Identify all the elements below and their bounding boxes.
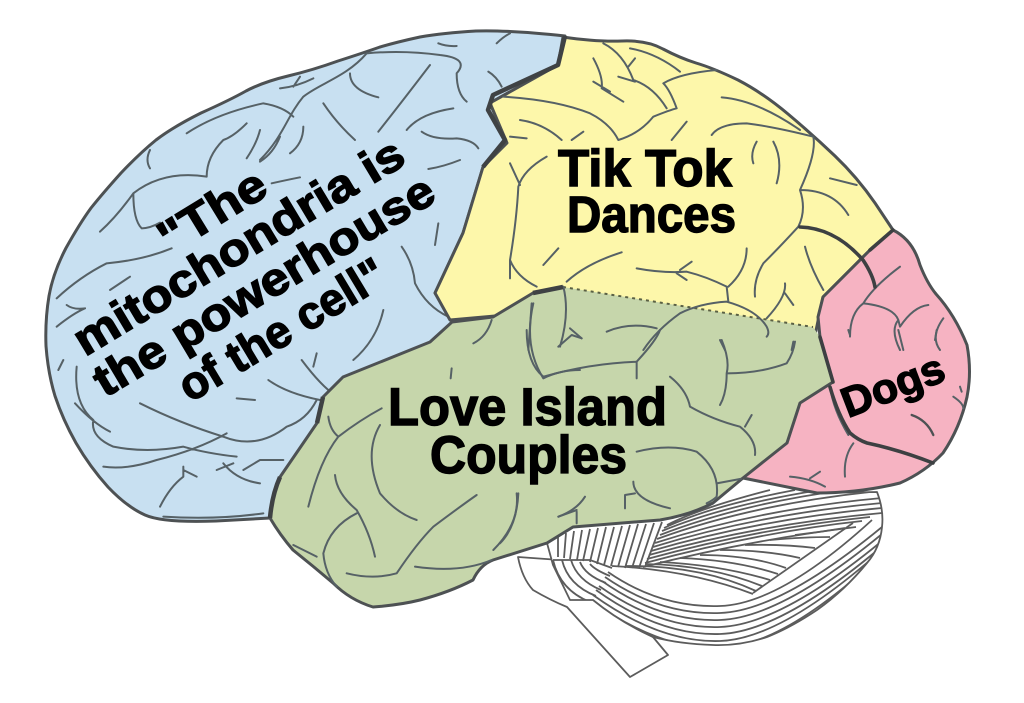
label: frontal lobe quote: of the cell": [168, 247, 395, 412]
label: frontal lobe quote: "The: [148, 158, 276, 264]
panel: occipital lobe (pink): [743, 227, 970, 493]
icon: brain stem: [518, 557, 668, 677]
cerebellum: [547, 478, 882, 648]
label: parietal lobe: Tik Tok: [558, 140, 732, 198]
label: frontal lobe quote: [63, 127, 444, 412]
parietal lobe folds: [503, 43, 857, 318]
label: temporal lobe: [388, 378, 667, 485]
label: temporal lobe: Love Island: [388, 378, 667, 437]
panel: parietal lobe (yellow): [435, 37, 893, 345]
occipital lobe folds: [850, 267, 943, 350]
temporal lobe folds, upper: [528, 287, 793, 350]
thick sulcus lines: [800, 227, 933, 463]
temporal lobe folds, right: [500, 330, 795, 543]
frontal lobe folds: [57, 33, 510, 518]
panel: frontal lobe (blue): [46, 31, 565, 521]
panel: temporal lobe (green): [270, 287, 833, 607]
label: parietal lobe: [558, 140, 736, 243]
label: frontal lobe quote: mitochondria is: [63, 127, 413, 366]
temporal lobe outline: [270, 287, 743, 607]
label: frontal lobe quote: the powerhouse: [84, 164, 444, 407]
thick lobe dividers: [270, 36, 565, 518]
occipital lobe lower folds: [790, 330, 963, 487]
label: temporal lobe: Couples: [430, 426, 627, 485]
dotted lobe boundary: [563, 287, 813, 327]
label: parietal lobe: Dances: [567, 186, 736, 243]
label: occipital lobe: Dogs: [834, 344, 951, 426]
temporal lobe folds, left: [293, 303, 580, 587]
